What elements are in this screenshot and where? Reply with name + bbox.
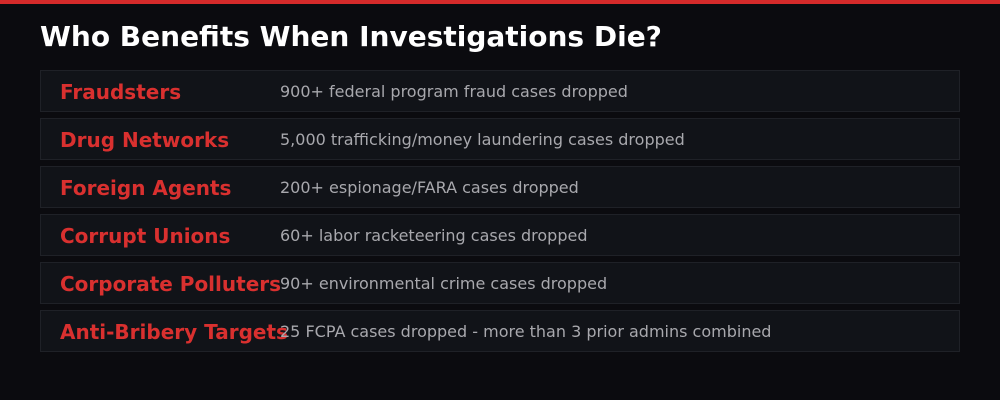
- row: corporate polluters: 90+ environmental crime cases dropped: [280, 274, 607, 293]
- top accent bar: [0, 0, 1000, 4]
- row: fraudsters: [40, 70, 960, 112]
- row: fraudsters: 900+ federal program fraud cases dropped: [280, 82, 628, 101]
- row: foreign agents: Foreign Agents: [60, 176, 231, 200]
- row: foreign agents: [40, 166, 960, 208]
- row: anti-bribery targets: [40, 310, 960, 352]
- row: corrupt unions: Corrupt Unions: [60, 224, 230, 248]
- row: anti-bribery targets: Anti-Bribery Targets: [60, 320, 288, 344]
- row: drug networks: 5,000 trafficking/money laundering cases dropped: [280, 130, 685, 149]
- row: corporate polluters: Corporate Polluters: [60, 272, 281, 296]
- row: fraudsters: Fraudsters: [60, 80, 181, 104]
- row: corporate polluters: [40, 262, 960, 304]
- row: corrupt unions: 60+ labor racketeering cases dropped: [280, 226, 587, 245]
- title: Who Benefits When Investigations Die?: [40, 20, 662, 53]
- row: anti-bribery targets: 25 FCPA cases dropped - more than 3 prior admins combined: [280, 322, 771, 341]
- row: drug networks: [40, 118, 960, 160]
- row: drug networks: Drug Networks: [60, 128, 229, 152]
- row: corrupt unions: [40, 214, 960, 256]
- row: foreign agents: 200+ espionage/FARA cases dropped: [280, 178, 579, 197]
